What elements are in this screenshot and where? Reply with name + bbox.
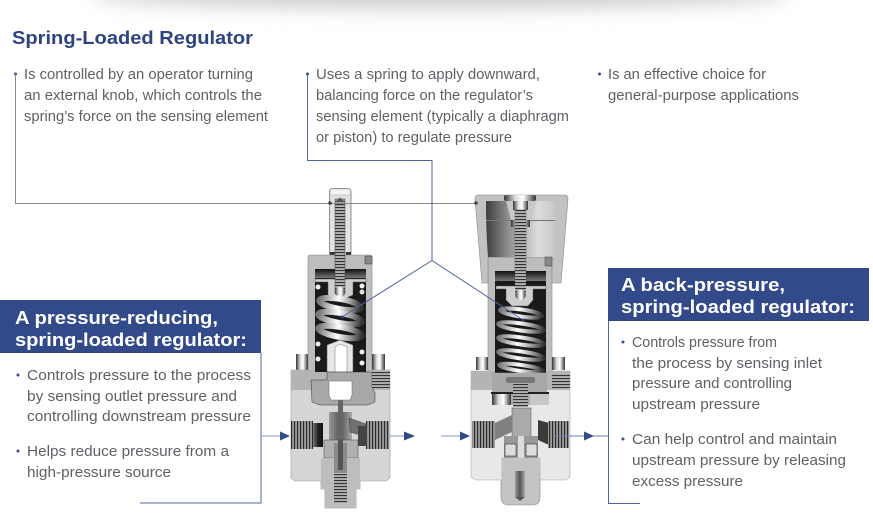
panel: pressure-reducing regulator [0,300,261,503]
bullet list: high-pressure source [27,465,171,481]
right regulator illustration [471,195,570,505]
text block: spring function: sensing element (typically a diaphragm [316,109,569,125]
spring coils [498,307,544,374]
text block: operator knob [14,67,268,125]
arrow: right inlet [441,432,470,440]
lower body [471,371,570,480]
lower body [291,370,390,481]
top shadow [90,0,790,9]
ports [291,421,313,449]
bullet list: Controls pressure to the process [27,368,251,384]
arrow: left inlet [261,432,290,440]
bullet list: by sensing outlet pressure and [27,389,237,405]
ports [472,421,495,448]
knob cap [475,195,568,283]
central stem [512,408,531,444]
heading: spring-loaded regulator: [15,329,247,350]
text block: operator knob: an external knob, which controls the [24,88,262,104]
bullet list: Helps reduce pressure from a [27,444,230,460]
bullet list: excess pressure [632,474,743,490]
text block: spring function: balancing force on the regulator’s [316,88,533,104]
small spring [513,377,528,407]
panel outline [140,353,261,503]
bolts [476,357,488,370]
text block: general purpose: general-purpose applications [608,88,799,104]
bullet list: pressure and controlling [632,376,792,392]
left regulator illustration [291,188,390,508]
bullet list: upstream pressure by releasing [632,453,846,469]
heading [608,268,869,321]
arrow: left outlet [388,432,415,440]
text block: spring function [306,67,569,146]
text block: operator knob: Is controlled by an operator turning [24,67,253,83]
heading: A pressure-reducing, [15,307,218,328]
heading [0,300,261,353]
text block: operator knob: spring’s force on the sensing element [24,109,268,125]
screw [515,210,526,295]
bullet list [16,368,251,481]
valve chamber [329,412,352,442]
bullet list: the process by sensing inlet [632,356,822,372]
knob stem [330,188,351,256]
spring seat [315,279,366,298]
text block: general purpose [598,67,799,104]
bolts [296,354,308,370]
lower stem [321,470,360,508]
arrow: right outlet [555,432,608,440]
bullet list: upstream pressure [632,397,760,413]
housing [488,257,552,373]
bullet list: Controls pressure from [632,335,777,351]
text block: spring function: or piston) to regulate pressure [316,130,512,146]
lower spring [334,474,347,503]
title: Spring-Loaded Regulator [12,27,253,48]
lower stem [501,470,540,505]
leader line: external knob [16,74,478,205]
upper housing [308,255,372,373]
piston top [327,340,353,372]
spring coils [317,295,363,341]
bullet list [622,335,846,490]
screw [335,199,345,293]
heading: spring-loaded regulator: [621,296,855,317]
panel outline [608,321,640,504]
text block: spring function: Uses a spring to apply downward, [316,67,540,83]
panel: back-pressure regulator [608,268,869,504]
bullet list: Can help control and maintain [632,432,837,448]
bullet list: controlling downstream pressure [27,409,251,425]
leader line: spring [308,74,524,322]
bores [495,415,512,440]
heading: A back-pressure, [621,274,785,295]
text block: general purpose: Is an effective choice for [608,67,766,83]
spring cavity [495,271,546,373]
